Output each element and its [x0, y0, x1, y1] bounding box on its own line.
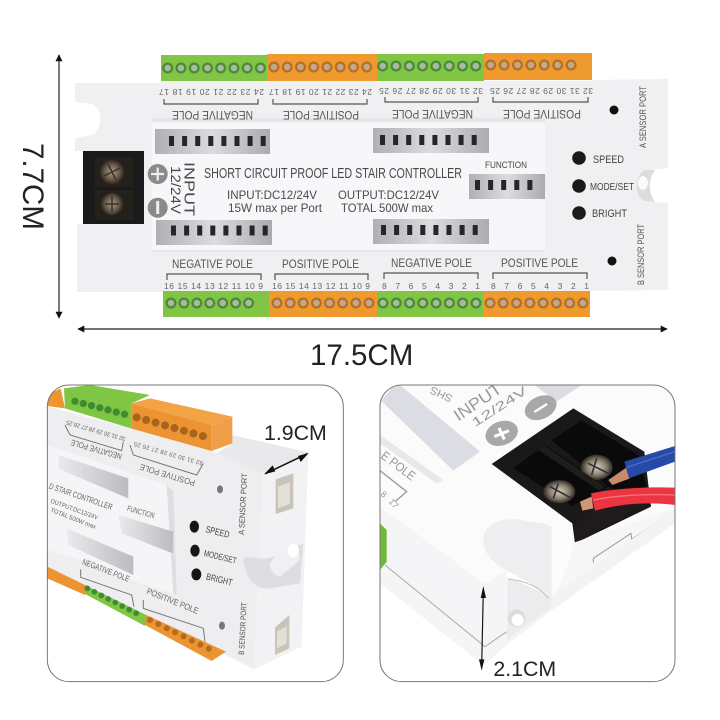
thickness dimension — [264, 453, 309, 474]
sensor labels and dots: A SENSOR PORT — [237, 473, 249, 535]
top pole labels: POSITIVE POLE — [503, 107, 581, 121]
socket openings — [58, 455, 173, 575]
top face — [210, 435, 308, 473]
product title and specifications — [204, 166, 462, 215]
panel outline — [47, 385, 343, 682]
product title and specifications: OUTPUT:DC12/24V — [338, 188, 439, 202]
panel printed text — [48, 418, 205, 642]
panel printed text: POSITIVE POLE — [145, 586, 200, 616]
input voltage label — [168, 162, 196, 216]
printed text: INPUT — [450, 379, 505, 425]
controller body — [75, 79, 668, 292]
control buttons: MODE/SET — [590, 182, 634, 193]
product title and specifications: INPUT:DC12/24V — [227, 188, 317, 202]
bottom port numbers: 16 15 14 13 12 11 10 9 — [164, 281, 263, 291]
bottom port numbers: 8 7 6 5 4 3 2 1 — [491, 281, 589, 291]
notch — [483, 508, 675, 666]
sensor labels and dots: B SENSOR PORT — [237, 602, 249, 655]
width dimension arrow: 17.5CM — [310, 339, 413, 372]
printed text: E POLE — [378, 449, 418, 483]
bottom pole labels: NEGATIVE POLE — [391, 256, 472, 270]
panel printed text: FUNCTION — [126, 504, 156, 520]
height label: 2.1CM — [493, 657, 556, 681]
product title and specifications: TOTAL 500W max — [341, 201, 433, 215]
top terminal blocks — [161, 53, 592, 82]
panel printed text: 32 31 30 29 28 27 26 25 — [133, 440, 204, 466]
panel printed text: TOTAL 500W max — [49, 507, 98, 531]
top port numbers: 24 23 22 21 20 19 18 17 — [159, 87, 264, 97]
printed text — [378, 379, 531, 510]
printed text: 12/24V — [469, 383, 531, 430]
top pole labels: NEGATIVE POLE — [392, 107, 473, 121]
panel printed text: NEGATIVE POLE — [81, 557, 132, 584]
top pole labels: NEGATIVE POLE — [172, 108, 253, 122]
panel printed text: NEGATIVE POLE — [69, 437, 123, 462]
raised inner plate — [47, 445, 173, 593]
printed text: SHS — [428, 383, 455, 404]
bottom pole labels: POSITIVE POLE — [282, 257, 359, 271]
panel printed text: D STAIR CONTROLLER — [48, 481, 114, 512]
mounting notch — [243, 543, 303, 589]
top pole labels: POSITIVE POLE — [283, 108, 359, 122]
panel: sensor port end thickness — [47, 385, 343, 682]
input voltage label: 12/24V — [168, 166, 183, 214]
bottom pole labels — [167, 256, 587, 280]
terminal strip top — [47, 385, 232, 451]
bottom pole labels: NEGATIVE POLE — [172, 257, 253, 271]
sensor ports: A SENSOR PORT — [638, 86, 649, 148]
bottom terminal blocks — [163, 291, 590, 317]
buttons: MODE/SET — [203, 548, 238, 566]
buttons: SPEED — [205, 524, 231, 540]
top port numbers — [159, 86, 593, 97]
slot openings — [381, 385, 582, 471]
red wire — [580, 487, 675, 511]
sensor labels and dots — [217, 473, 249, 655]
printed text: 8 — [379, 489, 389, 500]
input voltage label: INPUT — [180, 162, 196, 216]
terminal block: power input — [83, 151, 144, 224]
sensor ports — [608, 86, 649, 285]
panel printed text: 32 31 30 29 28 27 26 25 — [65, 418, 127, 441]
top port numbers: 32 31 30 29 28 27 26 25 — [379, 86, 483, 96]
top port numbers: 24 23 22 21 20 19 18 17 — [269, 87, 372, 97]
function label: FUNCTION — [485, 160, 527, 171]
sensor ports: B SENSOR PORT — [636, 224, 647, 285]
bottom port numbers: 8 7 6 5 4 3 2 1 — [382, 281, 480, 291]
height dimension arrow: 7.7CM — [16, 143, 49, 230]
bottom port numbers — [164, 281, 589, 291]
top face — [380, 385, 675, 597]
black terminal block — [492, 408, 651, 543]
left side wall — [380, 508, 507, 665]
bottom pole labels: POSITIVE POLE — [501, 256, 578, 270]
top pole labels — [164, 97, 588, 122]
strip recess — [380, 435, 443, 483]
side face — [254, 452, 308, 669]
control buttons: BRIGHT — [592, 208, 627, 220]
input polarity symbols — [148, 164, 168, 218]
polarity symbols — [486, 395, 556, 446]
screws — [543, 480, 575, 503]
panel outline — [380, 385, 675, 682]
panel printed text: OUTPUT:DC12/24V — [49, 498, 99, 522]
printed text: 17 — [387, 497, 401, 510]
front side wall — [574, 538, 585, 544]
buttons — [190, 521, 238, 588]
terminal strip bottom — [47, 567, 226, 661]
front face — [47, 407, 263, 669]
height dimension — [479, 586, 486, 671]
buttons: BRIGHT — [205, 572, 234, 588]
bottom port numbers: 16 15 14 13 12 11 10 9 — [272, 281, 370, 291]
thickness label: 1.9CM — [264, 421, 327, 445]
top port numbers: 32 31 30 29 28 27 26 25 — [490, 86, 593, 96]
control buttons: SPEED — [593, 154, 624, 166]
product title and specifications: 15W max per Port — [228, 201, 323, 215]
blue wire — [608, 446, 675, 485]
connector slots — [155, 128, 545, 245]
panel: input terminal and height — [378, 379, 675, 682]
panel printed text: POSITIVE POLE — [138, 462, 196, 488]
control buttons — [572, 151, 634, 220]
sensor sockets — [275, 473, 293, 655]
product title and specifications: SHORT CIRCUIT PROOF LED STAIR CONTROLLER — [204, 166, 462, 182]
